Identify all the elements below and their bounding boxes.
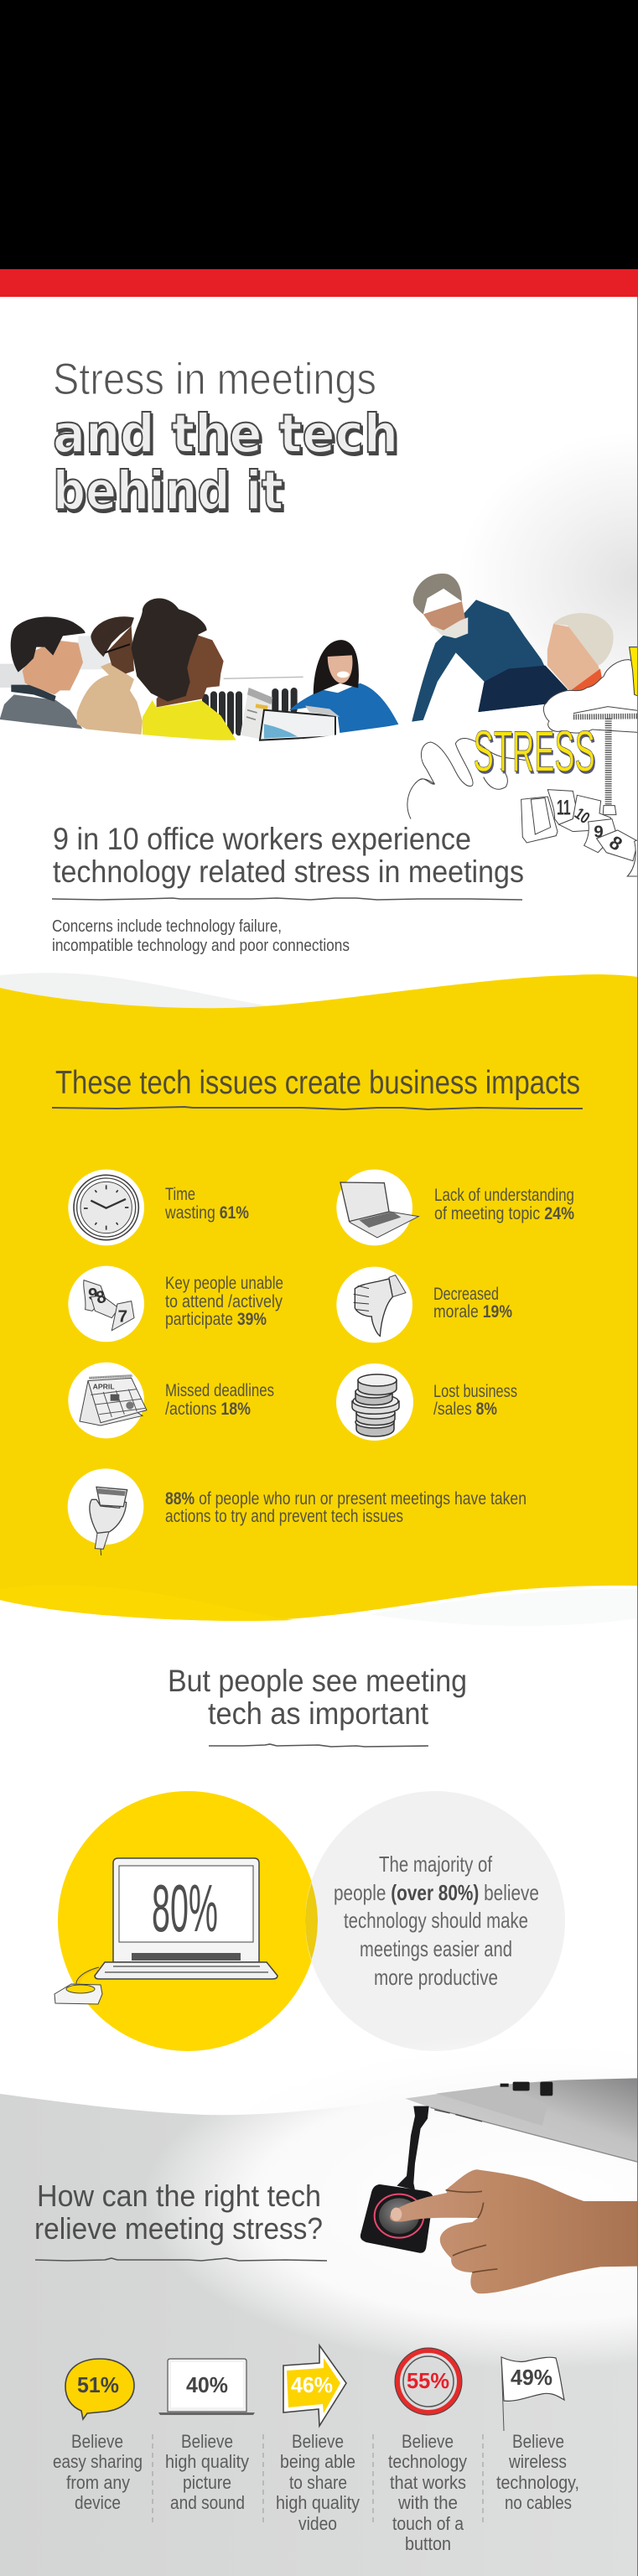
caption: from any [66,2472,131,2493]
concerns text: Concerns include technology failure, [52,917,282,936]
text: Time [165,1184,195,1204]
panel: yellow business impacts [0,974,638,1621]
caption: and sound [170,2492,245,2513]
icon: laptop [336,1170,418,1245]
icon: arrow [283,2345,346,2426]
text [433,1284,512,1322]
icon: red ring [395,2348,462,2415]
value: 51% [77,2372,119,2397]
item: lost business [336,1363,517,1441]
item: 88% actions [68,1468,526,1555]
heading: how can the right tech: relieve meeting stress? [34,2211,323,2246]
caption: Believe [292,2431,344,2452]
ribbon [407,739,526,819]
icon: calendar pages: 8 [94,1287,108,1308]
icon: laptop with 80% [95,1858,278,1979]
caption: high quality [165,2451,250,2472]
heading: how can the right tech: How can the right tech [37,2179,321,2213]
caption: touch of a [392,2513,464,2534]
icon: speech bubble [65,2359,134,2419]
stat: 49% wireless [496,2357,579,2513]
caption: device [75,2492,121,2513]
icon: calendar pages: 9 [88,1285,97,1304]
majority text: technology should make [344,1908,528,1933]
cloud doodle [543,660,638,733]
title [53,355,400,524]
icon: laptop [158,2359,255,2415]
caption: no cables [505,2492,572,2513]
caption [53,2431,143,2513]
section heading: 9 in 10 office workers: technology related stress in meetings [53,854,524,889]
text: to attend /actively [165,1291,283,1311]
heading: meeting tech important [168,1664,467,1731]
left people [0,598,335,740]
button dongle [360,2184,433,2253]
crane [573,707,638,815]
majority text: meetings easier and [360,1936,512,1961]
icon: clock [68,1170,144,1245]
icon: laptop with 80%: 80% [152,1871,218,1945]
caption: Believe [512,2431,564,2452]
caption: with the [397,2492,458,2513]
caption: Believe [71,2431,123,2452]
caption [496,2431,579,2513]
item: decreased morale [336,1267,512,1343]
text: Missed deadlines [165,1380,274,1400]
icon: thumb down [336,1267,412,1343]
section heading: 9 in 10 office workers: 9 in 10 office workers experience [53,822,471,856]
caption: Believe [402,2431,454,2452]
stat: 40% picture and sound [158,2359,255,2513]
caption: technology [388,2451,468,2472]
caption: video [298,2513,337,2534]
panel: grey how can tech relieve stress [0,2033,638,2576]
caption: technology, [496,2472,579,2493]
caption [165,2431,250,2513]
title line: behind it: behind it [53,460,283,522]
stat: 51% easy sharing [53,2359,143,2513]
panel: grey majority circle [305,1791,565,2051]
hand [390,2169,638,2293]
right people [289,574,614,733]
calendar pages: 9 [594,822,604,841]
icon: desk calendar: APRIL [93,1383,115,1391]
caption: wireless [508,2451,567,2472]
heading: meeting tech important: tech as important [208,1696,429,1731]
concerns text [52,917,350,955]
value: 49% [511,2365,552,2390]
text [434,1185,574,1223]
icon: flag [501,2357,564,2431]
text [165,1380,274,1419]
majority text [334,1852,539,1990]
item: lack of understanding [336,1170,574,1245]
calendar pages: 8 [605,831,626,855]
text: 88% of people who run or present meetings have taken [165,1488,526,1509]
caption: button [405,2533,451,2554]
text: wasting 61% [164,1202,249,1223]
concerns text: incompatible technology and poor connections [52,937,350,955]
illustration: stress doodle with crane, ribbon and calendar pages [407,647,638,876]
text [164,1184,249,1223]
stat: 55% touch of a button [388,2348,468,2554]
laptop corner [405,2078,638,2162]
caption: Believe [181,2431,233,2452]
heading: how can the right tech [34,2179,323,2246]
caption [276,2431,360,2534]
photo: hand pressing button on table [360,2078,638,2293]
icon: coins [336,1363,413,1441]
caption: being able [280,2451,355,2472]
value: 46% [291,2372,333,2397]
value: 55% [407,2368,449,2393]
red band [0,269,638,297]
calendar pages: 11 [557,797,571,820]
caption: that works [390,2472,466,2493]
text [165,1273,283,1329]
text: participate 39% [165,1309,267,1329]
value: 40% [186,2372,228,2397]
white curve under photo [0,692,638,981]
icon: button dongle with cable [54,1967,102,2004]
item: key people unable [68,1266,283,1342]
white light glow [143,2033,638,2369]
cable [397,2106,429,2190]
text: Key people unable [165,1273,283,1293]
big yellow letter [630,647,638,696]
caption: picture [183,2472,231,2493]
panel: 80% yellow circle [54,1791,318,2051]
item: time wasting [68,1170,249,1245]
section heading: 9 in 10 office workers [53,822,524,889]
title line: Stress in meetings: Stress in meetings [53,355,376,404]
caption: high quality [276,2492,360,2513]
text: Lack of understanding [434,1185,574,1205]
heading: meeting tech important: But people see meeting [168,1664,467,1698]
text: /actions 18% [165,1399,251,1419]
icon: calendar pages [68,1266,144,1342]
text: morale 19% [433,1301,512,1322]
title line: and the tech: and the tech [53,403,398,465]
photo: meeting team [0,574,614,740]
text: Decreased [433,1284,499,1304]
white wave below yellow [369,1589,638,1626]
calendar pages: 10 [571,805,593,828]
item: missed deadlines [68,1363,274,1438]
caption: easy sharing [53,2451,143,2472]
title line: behind it: behind it [54,463,285,524]
majority text: more productive [374,1965,498,1990]
text: of meeting topic 24% [434,1203,574,1223]
icon: plug [68,1468,143,1555]
majority text: people (over 80%) believe [334,1880,539,1905]
majority text: The majority of [379,1852,493,1877]
icon: desk calendar [68,1363,147,1438]
wall background of the photo [458,432,638,725]
icon: calendar pages: 7 [118,1307,127,1327]
text [165,1488,526,1526]
caption: to share [289,2472,347,2493]
black top banner [0,0,638,269]
text: Lost business [433,1381,517,1401]
text: /sales 8% [433,1399,497,1419]
calendar pages [521,790,638,876]
title line: and the tech: and the tech [54,406,400,467]
stat: 46% high quality video [276,2345,360,2534]
text [433,1381,517,1419]
caption [388,2431,468,2554]
text: actions to try and prevent tech issues [165,1506,403,1526]
grey wave behind yellow panel [0,973,289,1009]
